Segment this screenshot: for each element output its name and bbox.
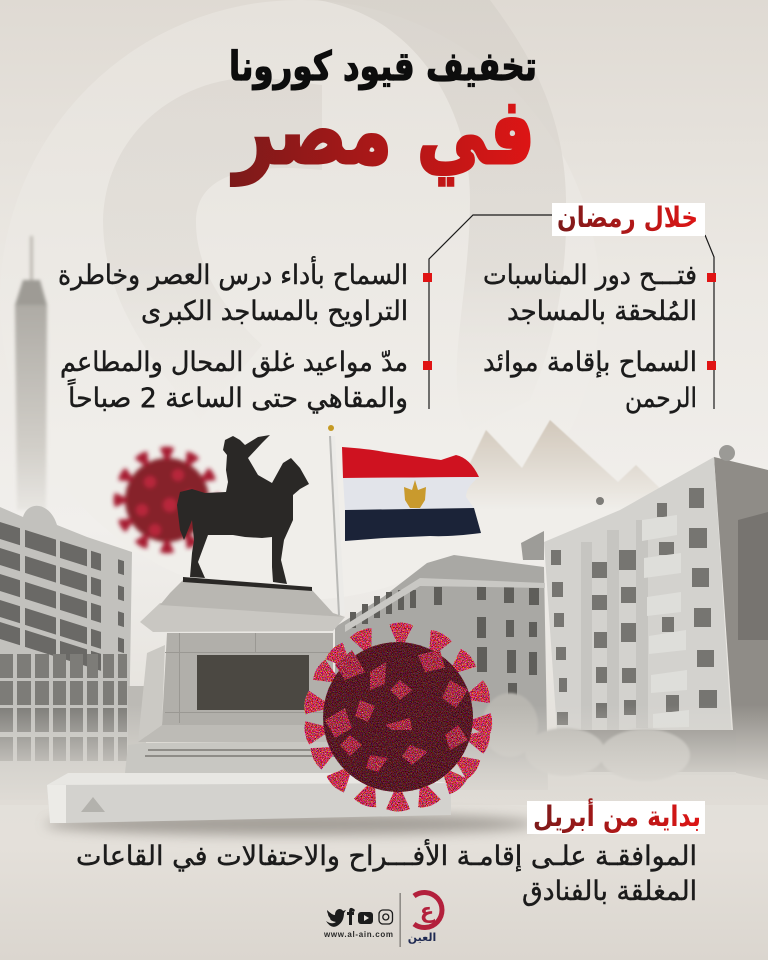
icon: youtube [358,912,373,924]
pyramids [452,420,672,560]
lower steps [125,741,345,773]
right column text [483,260,697,414]
egyptian flag [342,447,481,541]
bronze plaque [197,655,309,710]
subtitle: في مصر [231,78,535,186]
footer divider [400,893,401,947]
tag: beginning of April: بداية من أبريل [533,798,701,833]
connector lines [429,215,714,409]
left column text: السماح بأداء درس العصر وخاطرة [58,255,408,291]
building middle [335,555,548,790]
right column text: الرحمن [625,383,697,414]
logo: ع [420,899,436,923]
title: تخفيف قيود كورونا [229,44,537,90]
flag pole [328,425,345,615]
trees and street haze [0,693,768,805]
top block [160,580,345,617]
watermark logo rings [0,0,600,600]
equestrian statue [177,435,309,584]
icon: twitter [326,909,346,927]
bullet markers [423,273,716,370]
logo: العين [408,931,436,944]
bottom text: المغلقة بالفنادق [522,876,697,907]
icon: instagram [379,910,392,924]
logo [408,892,442,944]
cornice [140,603,345,632]
left column text [58,255,408,414]
website: www.al-ain.com [323,930,393,939]
left column text: والمقاهي حتى الساعة 2 صباحاً [67,378,408,414]
footer social icons [323,908,393,939]
cairo tower [15,236,47,510]
right column text: فتـــح دور المناسبات [483,260,697,291]
bottom text: الموافقـة علـى إقامـة الأفـــراح والاحتفالات في القاعات [76,838,697,872]
eagle emblem [404,480,426,508]
pedestal body [138,633,340,742]
blurred small virus [114,446,220,554]
building right [521,445,768,780]
left column text: التراويح بالمساجد الكبرى [141,296,408,327]
large virus [303,622,493,812]
building left [0,506,146,800]
statue pedestal [47,577,451,823]
right column text: السماح بإقامة موائد [483,347,697,378]
title [229,44,537,186]
left column text: مدّ مواعيد غلق المحال والمطاعم [60,347,408,378]
right column text: المُلحقة بالمساجد [507,296,697,327]
icon: facebook [347,908,355,925]
ground shadow [45,813,535,835]
tag: during Ramadan: خلال رمضان [557,201,698,234]
marble base [47,773,451,823]
bottom text [76,838,697,907]
